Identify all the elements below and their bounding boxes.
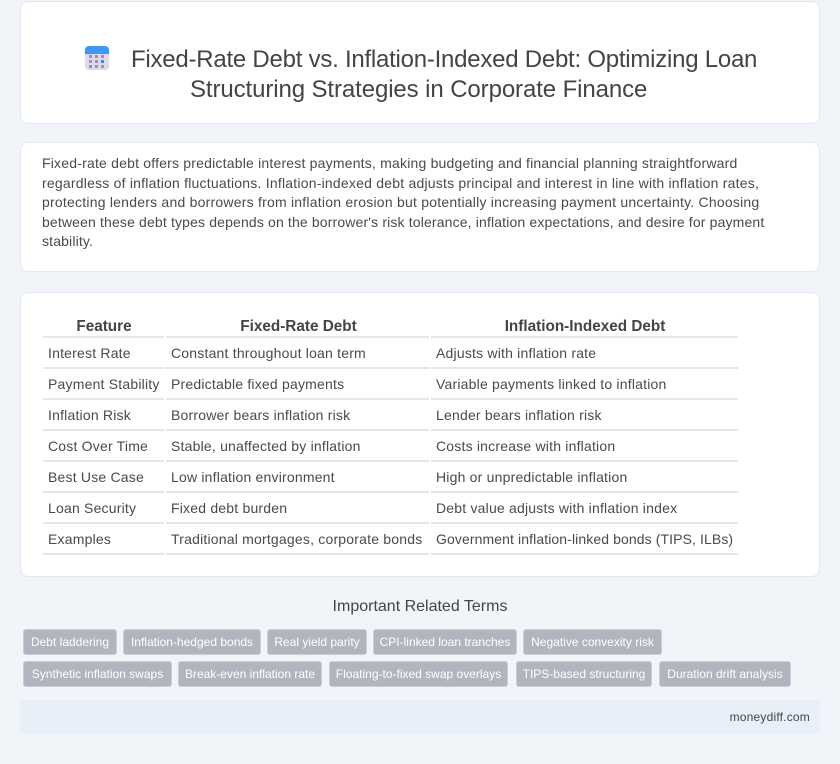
related term tags (23, 629, 791, 687)
row: loan security: Loan Security (48, 500, 136, 516)
related term tags: Negative convexity risk (531, 635, 654, 649)
related term tags: Debt laddering (31, 635, 109, 649)
row: best use case: Best Use Case (48, 469, 144, 485)
intro paragraph: Fixed-rate debt offers predictable interest payments, making budgeting and financial planning straightforward (42, 155, 738, 171)
icon: calendar (85, 46, 109, 70)
table header: Inflation-Indexed Debt (505, 318, 665, 335)
row: payment stability: Predictable fixed payments (171, 376, 344, 392)
row: cost over time (48, 438, 615, 454)
row: inflation risk: Borrower bears inflation risk (171, 407, 350, 423)
row: interest rate: Adjusts with inflation rate (436, 345, 596, 361)
table header: Feature (76, 318, 132, 335)
row: payment stability: Variable payments linked to inflation (436, 376, 666, 392)
row: best use case: High or unpredictable inflation (436, 469, 627, 485)
row: interest rate (48, 345, 596, 361)
title (131, 46, 757, 102)
row: inflation risk (48, 407, 602, 423)
row: examples: Government inflation-linked bonds (TIPS, ILBs) (436, 531, 733, 547)
related terms heading: Important Related Terms (333, 598, 507, 615)
table header: Fixed-Rate Debt (240, 318, 357, 335)
related term tags: TIPS-based structuring (523, 667, 645, 681)
table header (76, 318, 666, 335)
related term tags: Inflation-hedged bonds (131, 635, 253, 649)
row: cost over time: Stable, unaffected by inflation (171, 438, 361, 454)
related term tags: Duration drift analysis (667, 667, 783, 681)
row: interest rate: Interest Rate (48, 345, 131, 361)
row: best use case (48, 469, 627, 485)
intro text panel (20, 142, 820, 272)
intro paragraph: stability. (42, 233, 93, 249)
title: Fixed-Rate Debt vs. Inflation-Indexed Debt: Optimizing Loan (131, 46, 757, 73)
intro paragraph (42, 155, 764, 249)
row: best use case: Low inflation environment (171, 469, 335, 485)
row: examples: Traditional mortgages, corporate bonds (171, 531, 422, 547)
row: cost over time: Costs increase with inflation (436, 438, 615, 454)
row: examples: Examples (48, 531, 111, 547)
row: payment stability (48, 376, 666, 392)
row: examples (48, 531, 733, 547)
header card (20, 1, 820, 124)
row: loan security (48, 500, 677, 516)
related term tags: Real yield parity (274, 635, 360, 649)
related term tags: CPI-linked loan tranches (380, 635, 510, 649)
row: cost over time: Cost Over Time (48, 438, 148, 454)
intro paragraph: between these debt types depends on the borrower's risk tolerance, inflation expectations, and desire for payment (42, 214, 764, 230)
related term tags: Break-even inflation rate (185, 667, 315, 681)
row: loan security: Debt value adjusts with inflation index (436, 500, 677, 516)
intro paragraph: regardless of inflation fluctuations. Inflation-indexed debt adjusts principal and interest in line with inflation rates, (42, 175, 759, 191)
row: interest rate: Constant throughout loan term (171, 345, 366, 361)
comparison table panel (20, 292, 820, 577)
intro paragraph: protecting lenders and borrowers from inflation erosion but potentially increasing payment uncertainty. Choosing (42, 194, 759, 210)
related term tags: Floating-to-fixed swap overlays (336, 667, 501, 681)
title: Structuring Strategies in Corporate Finance (190, 76, 647, 102)
footer source text: moneydiff.com (730, 710, 810, 724)
footer bar (20, 700, 820, 734)
related term tags: Synthetic inflation swaps (32, 667, 163, 681)
row: loan security: Fixed debt burden (171, 500, 287, 516)
row: inflation risk: Inflation Risk (48, 407, 131, 423)
row: payment stability: Payment Stability (48, 376, 160, 392)
row: inflation risk: Lender bears inflation risk (436, 407, 602, 423)
